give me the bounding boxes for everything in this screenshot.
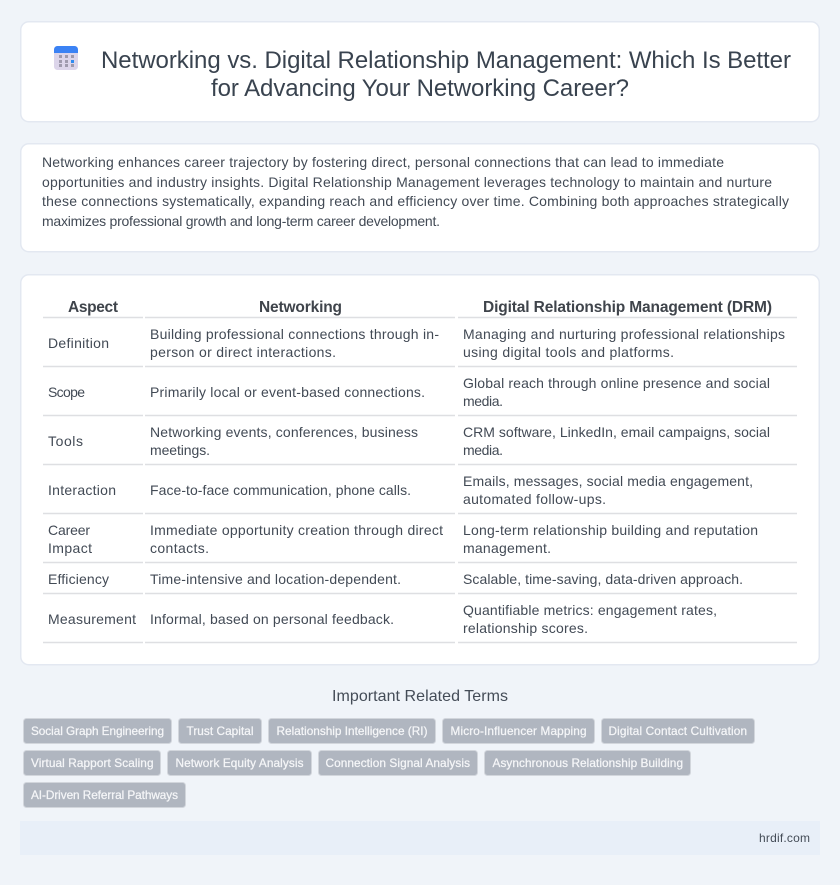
table row: career impact: Impact [48,540,92,556]
tag [24,750,160,776]
table row: tools: media. [463,442,503,458]
tag: AI-Driven Referral Pathways [31,788,178,802]
tag: Asynchronous Relationship Building [492,756,683,770]
table row: career impact [48,522,758,556]
table row: career impact: Long-term relationship building and reputation [463,522,758,538]
footer [20,821,820,855]
table row: interaction [48,473,753,507]
panel: introduction text: Networking enhances career trajectory by fostering direct, personal connections that can lead to immediate [42,154,724,170]
title: Networking vs. Digital Relationship Management: Which Is Better [101,47,791,74]
table row: efficiency: Time-intensive and location-dependent. [150,571,401,587]
table row: career impact: contacts. [150,540,209,556]
title [101,47,791,102]
table row: interaction: Interaction [48,482,116,498]
table row: definition: person or direct interactions. [150,344,336,360]
table header row: Aspect [68,299,118,316]
table row: measurement: Informal, based on personal feedback. [150,611,394,627]
icon: calendar [54,46,78,70]
table row: scope: Primarily local or event-based connections. [150,384,425,400]
panel: introduction text: opportunities and industry insights. Digital Relationship Management leverages technology to maintain and nurture [42,174,772,190]
table row: definition [48,326,785,360]
tag [484,750,690,776]
table row: career impact: Career [48,522,90,538]
table row: scope: media. [463,393,503,409]
table row: efficiency: Scalable, time-saving, data-driven approach. [463,571,743,587]
tag [602,718,754,744]
panel: introduction text: these connections systematically, expanding reach and efficiency over time. Combining both approaches strategically [42,193,789,209]
table row: definition: using digital tools and platforms. [463,344,674,360]
panel: comparison table [21,275,819,665]
table row: efficiency: Efficiency [48,571,109,587]
table header row [68,299,772,316]
table row: definition: Managing and nurturing professional relationships [463,326,785,342]
tag [24,718,172,744]
tag: Trust Capital [186,724,254,738]
table row: interaction: automated follow-ups. [463,491,606,507]
table row: career impact: management. [463,540,551,556]
table row: career impact: Immediate opportunity creation through direct [150,522,443,538]
table row: tools: meetings. [150,442,210,458]
tag: Relationship Intelligence (RI) [276,724,428,738]
tag [318,750,478,776]
title: for Advancing Your Networking Career? [211,75,629,102]
table row: efficiency [48,571,743,587]
tag [178,718,262,744]
table row: tools [48,424,770,458]
table row: measurement: Quantifiable metrics: engagement rates, [463,602,717,618]
table row: interaction: Face-to-face communication, phone calls. [150,482,411,498]
tag [168,750,312,776]
table row: scope: Global reach through online presence and social [463,375,770,391]
table row: definition: Building professional connections through in- [150,326,439,342]
table row: measurement [48,602,717,636]
table header row: Digital Relationship Management (DRM) [483,299,772,316]
table row: measurement: Measurement [48,611,136,627]
tag [268,718,436,744]
panel: introduction text [21,144,819,252]
tag: Micro-Influencer Mapping [450,724,586,738]
table row: tools: CRM software, LinkedIn, email campaigns, social [463,424,770,440]
tag: Network Equity Analysis [176,756,304,770]
panel: title header [21,22,819,122]
table row: scope [48,375,770,409]
tag [442,718,594,744]
tag: Virtual Rapport Scaling [31,756,154,770]
heading: important related terms: Important Related Terms [332,688,508,705]
tag: Digital Contact Cultivation [608,724,747,738]
tag cloud: related terms [24,718,754,808]
table row: tools: Networking events, conferences, business [150,424,418,440]
table row: definition: Definition [48,335,109,351]
tag: Connection Signal Analysis [326,756,470,770]
tag: Social Graph Engineering [31,724,164,738]
panel: introduction text: maximizes professional growth and long-term career development. [42,213,440,229]
table row: tools: Tools [48,433,83,449]
table header row: Networking [259,299,342,316]
table row: interaction: Emails, messages, social media engagement, [463,473,753,489]
table row: scope: Scope [48,384,85,400]
tag [24,782,186,808]
footer: hrdif.com [759,831,810,845]
table row: measurement: relationship scores. [463,620,588,636]
